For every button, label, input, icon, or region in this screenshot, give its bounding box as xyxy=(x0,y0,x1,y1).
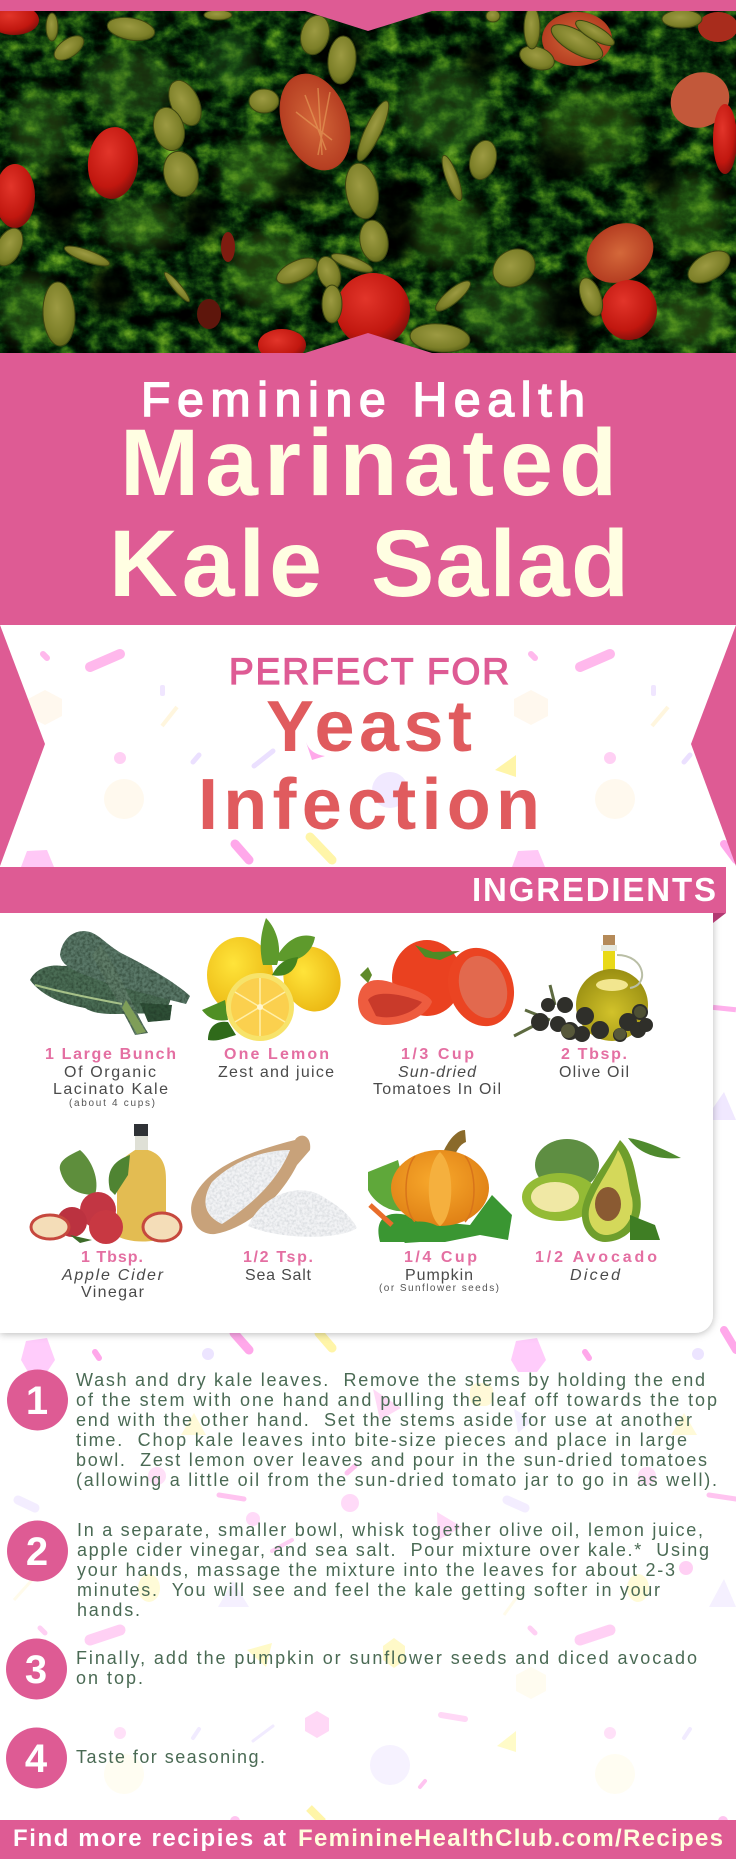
step 2: In a separate, smaller bowl, whisk together olive oil, lemon juice, xyxy=(77,1520,703,1540)
ingredient label: vinegar: Apple Cider xyxy=(61,1267,164,1284)
subtitle: Yeast: Yeast xyxy=(266,687,472,767)
top pink band with notch xyxy=(0,0,736,31)
step 2: apple cider vinegar, and sea salt. Pour mixture over kale.* Using xyxy=(77,1540,709,1560)
ingredient label: kale: Of Organic xyxy=(64,1064,156,1081)
ingredient label: sea salt: Sea Salt xyxy=(245,1267,312,1284)
ingredient label: kale: (about 4 cups) xyxy=(69,1098,155,1109)
title: Marinated: Marinated xyxy=(120,410,617,516)
step 1: (allowing a little oil from the sun-dried tomato jar to go in as well). xyxy=(76,1470,717,1490)
title panel xyxy=(0,333,736,625)
ingredient label: kale: 1 Large Bunch xyxy=(45,1046,176,1063)
step 3 xyxy=(6,1638,697,1700)
title: Salad: Salad xyxy=(371,511,629,617)
subtitle: Infection: Infection xyxy=(198,765,540,845)
ingredient label: pumpkin xyxy=(379,1249,499,1294)
icon: lacinato kale xyxy=(30,931,190,1035)
pumpkin seeds xyxy=(0,7,735,355)
ingredient label: olive oil: 2 Tbsp. xyxy=(561,1046,627,1063)
ribbon left tail xyxy=(0,625,45,866)
step 1: of the stem with one hand and pulling the leaf off towards the top xyxy=(76,1390,717,1410)
ingredient label: kale xyxy=(45,1046,176,1109)
icon: pumpkin xyxy=(368,1130,512,1243)
ingredient label: tomatoes: Tomatoes In Oil xyxy=(373,1081,501,1098)
ingredients card xyxy=(0,913,713,1333)
tomatoes xyxy=(0,5,736,361)
step 2 xyxy=(7,1520,709,1620)
step 1: end with the other hand. Set the stems aside for use at another xyxy=(76,1410,692,1430)
ingredient label: lemon: One Lemon xyxy=(224,1046,329,1063)
confetti background: steps section xyxy=(14,1330,736,1826)
ingredient label: lemon: Zest and juice xyxy=(218,1064,334,1081)
step 1: bowl. Zest lemon over leaves and pour in the sun-dried tomatoes xyxy=(76,1450,707,1470)
step 4: 4 xyxy=(25,1737,48,1781)
step 3: on top. xyxy=(76,1668,143,1688)
title: Feminine Health: Feminine Health xyxy=(141,374,585,427)
title: Kale: Kale xyxy=(109,511,322,617)
ingredient label: kale: Lacinato Kale xyxy=(53,1081,168,1098)
ingredient label: sea salt xyxy=(243,1249,313,1284)
ingredient label: pumpkin: Pumpkin xyxy=(405,1267,473,1284)
ingredients heading ribbon: INGREDIENTS xyxy=(472,871,716,908)
step 2: 2 xyxy=(26,1530,48,1574)
footer bar xyxy=(0,1820,736,1859)
icon: apple cider vinegar xyxy=(31,1124,181,1244)
ribbon right tail xyxy=(691,625,736,866)
step 3: Finally, add the pumpkin or sunflower seeds and diced avocado xyxy=(76,1648,697,1668)
step 2: hands. xyxy=(77,1600,140,1620)
ingredients heading ribbon xyxy=(0,867,726,923)
step 3: 3 xyxy=(25,1648,47,1692)
ingredient label: avocado xyxy=(535,1249,657,1284)
ingredient label: lemon xyxy=(218,1046,334,1081)
ingredient label: tomatoes: 1/3 Cup xyxy=(401,1046,474,1063)
footer bar: Find more recipies at xyxy=(13,1825,286,1852)
subtitle: perfect for: PERFECT FOR xyxy=(229,651,509,692)
step 1: 1 xyxy=(26,1379,48,1423)
icon: tomatoes xyxy=(358,938,525,1036)
ingredient label: olive oil xyxy=(559,1046,629,1081)
ingredient label: tomatoes: Sun-dried xyxy=(398,1064,477,1081)
icon: lemons xyxy=(202,918,350,1041)
ingredient label: vinegar: 1 Tbsp. xyxy=(81,1249,143,1266)
step 4 xyxy=(6,1728,265,1788)
step 1: time. Chop kale leaves into bite-size pieces and place in large xyxy=(76,1430,687,1450)
hero photo: kale salad with tomatoes and pumpkin seeds xyxy=(0,5,736,361)
icon: olive oil xyxy=(514,935,653,1042)
step 1: Wash and dry kale leaves. Remove the stems by holding the end xyxy=(76,1370,705,1390)
icon: sea salt and scoop xyxy=(191,1136,357,1237)
icon: avocado xyxy=(522,1138,681,1242)
ingredient label: sea salt: 1/2 Tsp. xyxy=(243,1249,313,1266)
step 2: minutes. You will see and feel the kale getting softer in your xyxy=(77,1580,660,1600)
step 2: your hands, massage the mixture into the leaves for about 2-3 xyxy=(77,1560,675,1580)
footer bar: FeminineHealthClub.com/Recipes xyxy=(298,1825,723,1852)
ingredient label: avocado: 1/2 Avocado xyxy=(535,1249,657,1266)
ingredient label: olive oil: Olive Oil xyxy=(559,1064,629,1081)
ingredient label: vinegar xyxy=(61,1249,164,1301)
ingredient label: avocado: Diced xyxy=(570,1267,621,1284)
ingredient label: pumpkin: (or Sunflower seeds) xyxy=(379,1283,499,1294)
ingredient label: pumpkin: 1/4 Cup xyxy=(404,1249,477,1266)
confetti background: ribbon section xyxy=(0,625,736,1859)
ingredient label: tomatoes xyxy=(373,1046,501,1098)
ingredient label: vinegar: Vinegar xyxy=(81,1284,145,1301)
step 1 xyxy=(7,1370,717,1490)
step 4: Taste for seasoning. xyxy=(76,1747,265,1767)
